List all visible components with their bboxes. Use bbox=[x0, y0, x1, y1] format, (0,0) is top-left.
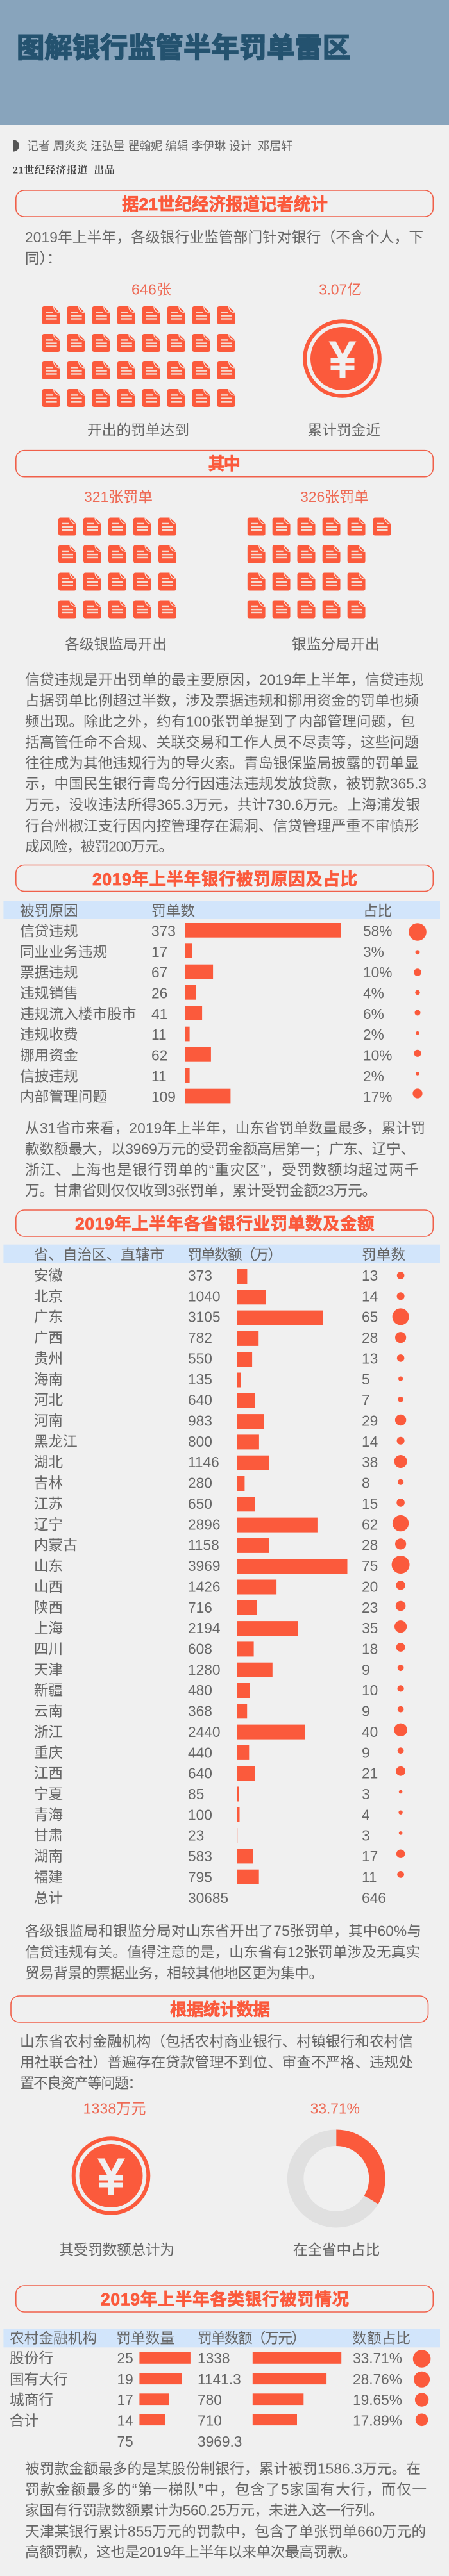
row: 股份行: 33.71% bbox=[353, 2350, 402, 2366]
row: 内部管理问题: 内部管理问题 bbox=[20, 1088, 107, 1105]
paragraph: closing: 高额罚款，这也是2019年上半年以来单次最高罚款。 bbox=[25, 2544, 357, 2561]
paragraph: rural finance: 用社联合社）普遍存在贷款管理不到位、审查不严格、违规处 bbox=[20, 2054, 413, 2070]
row: 福建: 11 bbox=[362, 1868, 377, 1885]
icon grid: tickets bbox=[42, 306, 235, 407]
row: 海南: 135 bbox=[188, 1371, 212, 1388]
table header bbox=[3, 901, 440, 919]
paragraph: rural finance: 山东省农村金融机构（包括农村商业银行、村镇银行和农村信 bbox=[20, 2033, 413, 2050]
paragraph: credit violations: 信贷违规是开出罚单的最主要原因，2019年上半年，信贷违规 bbox=[25, 672, 423, 688]
paragraph: credit violations: 示，中国民生银行青岛分行因违法违规发放贷款，被罚款365.3 bbox=[25, 776, 427, 792]
stat: 3.07亿 fines bbox=[305, 281, 380, 438]
table header: 罚单数量 bbox=[116, 2330, 174, 2347]
row: 违规收费: 11 bbox=[151, 1026, 167, 1043]
row: 黑龙江: 14 bbox=[362, 1433, 378, 1450]
row: 信披违规: 11 bbox=[151, 1068, 167, 1084]
paragraph: credit violations: 成风险，被罚200万元。 bbox=[25, 838, 173, 854]
row: 江苏: 650 bbox=[188, 1495, 212, 1512]
table header: 省、自治区、直辖市 bbox=[34, 1247, 164, 1263]
row: 违规收费: 违规收费 bbox=[20, 1026, 78, 1043]
row: 青海 bbox=[34, 1806, 403, 1823]
row: 新疆: 10 bbox=[362, 1682, 378, 1699]
row: 广西: 28 bbox=[362, 1329, 378, 1346]
row: 违规销售: 4% bbox=[363, 985, 384, 1001]
row: 河北 bbox=[34, 1392, 403, 1408]
section heading: 其中 bbox=[16, 451, 433, 477]
row: 河北: 7 bbox=[362, 1392, 370, 1408]
row: 浙江: 浙江 bbox=[34, 1724, 63, 1740]
row: 同业业务违规: 3% bbox=[363, 943, 384, 960]
row: 挪用资金: 62 bbox=[151, 1047, 167, 1064]
row: 安徽: 373 bbox=[188, 1267, 212, 1284]
row: 合计: 14 bbox=[117, 2413, 133, 2429]
row: 重庆: 9 bbox=[362, 1744, 370, 1761]
row: 甘肃: 甘肃 bbox=[34, 1827, 63, 1844]
row: 青海: 青海 bbox=[34, 1806, 63, 1823]
section heading: 各省银行业罚单数及金额 bbox=[16, 1210, 433, 1236]
paragraph: credit violations: 行台州椒江支行因内控管理存在漏洞、信贷管理严重不审慎形 bbox=[25, 817, 419, 834]
row: 广东: 3105 bbox=[188, 1309, 220, 1325]
row: 内蒙古: 28 bbox=[362, 1537, 378, 1554]
row: 国有大行: 19 bbox=[117, 2371, 133, 2388]
paragraph: Shandong: 信贷违规有关。值得注意的是，山东省有12张罚单涉及无真实 bbox=[25, 1943, 420, 1960]
row: 北京: 1040 bbox=[188, 1288, 220, 1304]
stat: 33.71% donut: 33.71% bbox=[310, 2100, 360, 2117]
stat: 321 tickets by regulators: 各级银监局开出 bbox=[65, 636, 167, 652]
row: 安徽 bbox=[34, 1267, 404, 1284]
row: 广东 bbox=[34, 1308, 409, 1325]
paragraph: Shandong: 贸易背景的票据业务，相较其他地区更为集中。 bbox=[25, 1965, 323, 1981]
stat: 33.71% donut: 在全省中占比 bbox=[293, 2241, 380, 2258]
paragraph: rural finance: 置不良资产等问题： bbox=[20, 2075, 142, 2091]
row: 吉林 bbox=[34, 1475, 403, 1492]
row: 江苏: 江苏 bbox=[34, 1495, 63, 1512]
row: 浙江: 2440 bbox=[188, 1724, 220, 1740]
paragraph: provinces: 万。甘肃省则仅仅收到3张罚单，累计受罚金额23万元。 bbox=[25, 1183, 377, 1199]
row: 广东: 广东 bbox=[34, 1309, 63, 1325]
row: 吉林: 8 bbox=[362, 1475, 370, 1492]
row: 宁夏: 85 bbox=[188, 1786, 204, 1802]
stat: 3.07亿 fines: 累计罚金近 bbox=[308, 422, 380, 438]
stat: 646 tickets: 开出的罚单达到 bbox=[87, 422, 189, 438]
row: 违规流入楼市股市: 违规流入楼市股市 bbox=[20, 1006, 136, 1022]
paragraph: provinces bbox=[25, 1120, 425, 1199]
row: 违规流入楼市股市: 41 bbox=[151, 1006, 167, 1022]
row: 上海: 2194 bbox=[188, 1620, 220, 1636]
row: 挪用资金 bbox=[20, 1047, 421, 1064]
paragraph: credit violations: 占据罚单比例超过半数，涉及票据违规和挪用资金的罚单也频 bbox=[25, 692, 419, 709]
row: 江西: 江西 bbox=[34, 1765, 63, 1782]
icon: yuan coin bbox=[74, 2138, 148, 2213]
row: 总计 bbox=[34, 1890, 386, 1906]
icon grid: 326 tickets bbox=[248, 518, 391, 618]
row: 票据违规: 票据违规 bbox=[20, 964, 78, 981]
row: 天津: 天津 bbox=[34, 1661, 63, 1678]
donut chart bbox=[296, 2138, 377, 2220]
row: 贵州 bbox=[34, 1350, 404, 1367]
row: 北京: 北京 bbox=[34, 1288, 63, 1304]
stat: 321 tickets by regulators: 321张罚单 bbox=[84, 488, 153, 505]
row: 股份行: 股份行 bbox=[10, 2350, 53, 2366]
row: 总计: 646 bbox=[362, 1890, 386, 1906]
table header bbox=[3, 2329, 440, 2347]
row: 内部管理问题: 109 bbox=[151, 1088, 176, 1105]
row: 内部管理问题 bbox=[20, 1088, 423, 1105]
row: 黑龙江: 黑龙江 bbox=[34, 1433, 78, 1450]
section heading: 各省银行业罚单数及金额: 2019年上半年各省银行业罚单数及金额 bbox=[75, 1214, 375, 1233]
table: provinces bbox=[3, 1245, 440, 1906]
row: 违规流入楼市股市 bbox=[20, 1006, 421, 1022]
section heading: 其中: 其中 bbox=[208, 454, 241, 474]
row: 湖北 bbox=[34, 1454, 407, 1470]
row: 重庆: 重庆 bbox=[34, 1744, 63, 1761]
row: totals: 3969.3 bbox=[198, 2433, 242, 2450]
row: 广西 bbox=[34, 1329, 406, 1346]
row: 湖北: 1146 bbox=[188, 1454, 219, 1470]
paragraph: credit violations: 括高管任命不合规、关联交易和工作人员不尽责等，这些问题 bbox=[25, 734, 419, 751]
row: 陕西: 23 bbox=[362, 1599, 378, 1616]
row: 国有大行 bbox=[10, 2371, 430, 2388]
paragraph: rural finance bbox=[20, 2033, 413, 2091]
row: 江西: 640 bbox=[188, 1765, 212, 1782]
row: 湖南: 湖南 bbox=[34, 1848, 63, 1865]
row: 四川: 四川 bbox=[34, 1641, 63, 1658]
paragraph: closing: 被罚款金额最多的是某股份制银行，累计被罚1586.3万元。在 bbox=[25, 2461, 421, 2477]
row: 重庆: 440 bbox=[188, 1744, 212, 1761]
stat: 326 tickets by sub-bureaus: 银监分局开出 bbox=[292, 636, 380, 652]
table header: 数额占比 bbox=[352, 2330, 411, 2347]
header banner bbox=[0, 0, 449, 125]
stat: 321 tickets by regulators bbox=[58, 488, 176, 652]
row: 国有大行: 1141.3 bbox=[198, 2371, 241, 2388]
stat: 326 tickets by sub-bureaus bbox=[248, 488, 391, 652]
row: 四川: 18 bbox=[362, 1641, 378, 1658]
table header bbox=[3, 1245, 440, 1263]
row: 城商行: 19.65% bbox=[353, 2391, 402, 2408]
row: 重庆 bbox=[34, 1744, 403, 1761]
row: 股份行 bbox=[10, 2350, 430, 2368]
row: 黑龙江: 800 bbox=[188, 1433, 212, 1450]
row: 城商行: 780 bbox=[198, 2391, 222, 2408]
paragraph: Shandong: 各级银监局和银监分局对山东省开出了75张罚单，其中60%与 bbox=[25, 1923, 421, 1940]
row: 广西: 广西 bbox=[34, 1329, 63, 1346]
row: 辽宁: 2896 bbox=[188, 1516, 220, 1533]
row: 内蒙古 bbox=[34, 1537, 406, 1554]
row: 贵州: 550 bbox=[188, 1350, 212, 1367]
table header: 罚单数 bbox=[151, 902, 195, 919]
section heading: 各类银行被罚情况 bbox=[16, 2286, 433, 2312]
row: 北京 bbox=[34, 1288, 405, 1304]
row: 信贷违规 bbox=[20, 923, 427, 941]
paragraph: closing: 天津某银行累计855万元的罚款中，包含了单张罚单660万元的 bbox=[25, 2523, 426, 2539]
table header: 被罚原因 bbox=[20, 902, 78, 919]
section heading: 根据统计数据 bbox=[11, 1996, 428, 2022]
table header: 占比 bbox=[363, 902, 392, 919]
stat: 646 tickets: 646张 bbox=[131, 281, 171, 297]
row: 违规流入楼市股市: 6% bbox=[363, 1006, 384, 1022]
row: 安徽: 13 bbox=[362, 1267, 378, 1284]
row: 云南: 9 bbox=[362, 1703, 370, 1720]
row: 违规销售: 违规销售 bbox=[20, 985, 78, 1001]
row: 陕西: 陕西 bbox=[34, 1599, 63, 1616]
row: 票据违规 bbox=[20, 964, 421, 981]
row: 天津: 9 bbox=[362, 1661, 370, 1678]
row: 挪用资金: 10% bbox=[363, 1047, 392, 1064]
row: 山东: 山东 bbox=[34, 1558, 63, 1574]
row: 陕西 bbox=[34, 1599, 405, 1616]
paragraph: credit violations: 频出现。除此之外，约有100张罚单提到了内部管理问题，包 bbox=[25, 713, 415, 729]
row: 内蒙古: 1158 bbox=[188, 1537, 219, 1554]
row: 辽宁 bbox=[34, 1515, 409, 1533]
row: 浙江: 40 bbox=[362, 1724, 378, 1740]
row: 内部管理问题: 17% bbox=[363, 1088, 392, 1105]
section heading: 银行被罚原因及占比: 2019年上半年银行被罚原因及占比 bbox=[92, 870, 357, 889]
paragraph: closing bbox=[25, 2461, 427, 2561]
row: 黑龙江 bbox=[34, 1433, 405, 1450]
row: 信贷违规: 58% bbox=[363, 923, 392, 940]
row: 股份行: 1338 bbox=[198, 2350, 230, 2366]
table header: 罚单数 bbox=[362, 1247, 405, 1263]
row: 总计: 总计 bbox=[34, 1890, 63, 1906]
row: 湖北: 湖北 bbox=[34, 1454, 63, 1470]
row: 同业业务违规: 17 bbox=[151, 943, 167, 960]
intro text: 2019年上半年，各级银行业监管部门针对银行（不含个人，下 bbox=[25, 229, 423, 245]
row: 新疆: 480 bbox=[188, 1682, 212, 1699]
row: 吉林: 280 bbox=[188, 1475, 212, 1492]
row: 青海: 4 bbox=[362, 1806, 370, 1823]
stat: 1338万元 bbox=[59, 2100, 174, 2258]
row: 贵州: 贵州 bbox=[34, 1350, 63, 1367]
stat: 3.07亿 fines: 3.07亿 bbox=[319, 281, 362, 297]
row: 挪用资金: 挪用资金 bbox=[20, 1047, 78, 1064]
row: 贵州: 13 bbox=[362, 1350, 378, 1367]
title: 图解银行监管半年罚单雷区 bbox=[17, 33, 350, 64]
row: 甘肃 bbox=[34, 1827, 402, 1844]
stat: 1338万元: 其受罚数额总计为 bbox=[59, 2241, 174, 2258]
row: totals: 75 bbox=[117, 2433, 133, 2450]
row: 上海: 上海 bbox=[34, 1620, 63, 1636]
row: 海南: 5 bbox=[362, 1371, 370, 1388]
row: 辽宁: 62 bbox=[362, 1516, 378, 1533]
row: 同业业务违规: 同业业务违规 bbox=[20, 943, 107, 960]
stat: 326 tickets by sub-bureaus: 326张罚单 bbox=[300, 488, 369, 505]
row: 新疆: 新疆 bbox=[34, 1682, 63, 1699]
section heading: 根据统计数据: 根据统计数据 bbox=[170, 2000, 270, 2019]
row: 国有大行: 28.76% bbox=[353, 2371, 402, 2388]
row: 山东 bbox=[34, 1556, 410, 1574]
row: 福建: 795 bbox=[188, 1868, 212, 1885]
paragraph: provinces: 浙江、上海也是银行罚单的“重灾区”，受罚数额均超过两千 bbox=[25, 1161, 419, 1178]
row: 山西: 1426 bbox=[188, 1578, 220, 1595]
row: 河北: 640 bbox=[188, 1392, 212, 1408]
row: 天津 bbox=[34, 1661, 403, 1678]
paragraph: credit violations: 往往成为其他违规行为的导火索。青岛银保监局披露的罚单显 bbox=[25, 754, 419, 771]
table header: 农村金融机构 bbox=[10, 2330, 97, 2347]
table: penalty reasons bbox=[3, 901, 440, 1105]
section heading: 银行被罚原因及占比 bbox=[16, 865, 433, 891]
row: 信贷违规: 信贷违规 bbox=[20, 923, 78, 940]
section heading: 据21世纪经济报道记者统计: 据21世纪经济报道记者统计 bbox=[122, 195, 328, 214]
row: 违规销售: 26 bbox=[151, 985, 167, 1001]
row: totals bbox=[117, 2433, 242, 2450]
row: 违规收费 bbox=[20, 1026, 419, 1043]
paragraph: provinces: 从31省市来看，2019年上半年，山东省罚单数量最多，累计罚 bbox=[25, 1120, 425, 1136]
stat: 33.71% donut bbox=[293, 2100, 380, 2258]
table: bank types bbox=[3, 2329, 440, 2450]
row: 河南 bbox=[34, 1413, 406, 1429]
row: 城商行: 城商行 bbox=[10, 2391, 53, 2408]
row: 合计 bbox=[10, 2413, 428, 2429]
row: 宁夏: 宁夏 bbox=[34, 1786, 63, 1802]
row: 四川: 608 bbox=[188, 1641, 212, 1658]
row: 山西: 山西 bbox=[34, 1578, 63, 1595]
intro text: 同）： bbox=[25, 250, 62, 267]
paragraph: credit violations: 万元，没收违法所得365.3万元，共计730.6万元。上海浦发银 bbox=[25, 796, 420, 813]
paragraph: Shandong bbox=[25, 1923, 421, 1981]
row: 信披违规: 2% bbox=[363, 1068, 384, 1084]
row: 云南 bbox=[34, 1703, 403, 1720]
row: 信披违规: 信披违规 bbox=[20, 1068, 78, 1084]
row: 陕西: 716 bbox=[188, 1599, 212, 1616]
row: 江西: 21 bbox=[362, 1765, 378, 1782]
row: 江西 bbox=[34, 1765, 405, 1782]
row: 信披违规 bbox=[20, 1068, 419, 1084]
row: 福建 bbox=[34, 1868, 404, 1885]
row: 云南: 368 bbox=[188, 1703, 212, 1720]
row: 山西 bbox=[34, 1578, 405, 1595]
row: 青海: 100 bbox=[188, 1806, 212, 1823]
paragraph: closing: 家国有行罚款数额累计为560.25万元，未进入这一行列。 bbox=[25, 2502, 384, 2519]
icon grid: 321 tickets bbox=[58, 518, 176, 618]
row: 湖北: 38 bbox=[362, 1454, 378, 1470]
intro text bbox=[25, 229, 423, 267]
row: 海南: 海南 bbox=[34, 1371, 63, 1388]
row: 湖南: 17 bbox=[362, 1848, 378, 1865]
row: 国有大行: 国有大行 bbox=[10, 2371, 68, 2388]
row: 浙江 bbox=[34, 1724, 407, 1740]
row: 合计: 17.89% bbox=[353, 2413, 402, 2429]
source credit: 21世纪经济报道 出品 bbox=[13, 164, 115, 176]
row: 天津: 1280 bbox=[188, 1661, 220, 1678]
row: 票据违规: 10% bbox=[363, 964, 392, 981]
row: 合计: 710 bbox=[198, 2413, 222, 2429]
row: 信贷违规: 373 bbox=[151, 923, 176, 940]
row: 北京: 14 bbox=[362, 1288, 378, 1304]
row: 山东: 3969 bbox=[188, 1558, 220, 1574]
row: 甘肃: 23 bbox=[188, 1827, 204, 1844]
row: 河南: 河南 bbox=[34, 1413, 63, 1429]
stat: 646 tickets bbox=[42, 281, 235, 438]
row: 江苏: 15 bbox=[362, 1495, 378, 1512]
row: 上海 bbox=[34, 1620, 407, 1636]
row: 广西: 782 bbox=[188, 1329, 212, 1346]
row: 河南: 983 bbox=[188, 1413, 212, 1429]
row: 宁夏: 3 bbox=[362, 1786, 370, 1802]
row: 山西: 20 bbox=[362, 1578, 378, 1595]
table header: 罚单数额（万） bbox=[187, 1247, 282, 1263]
row: 广东: 65 bbox=[362, 1309, 378, 1325]
row: 河北: 河北 bbox=[34, 1392, 63, 1408]
row: 安徽: 安徽 bbox=[34, 1267, 63, 1284]
row: 湖南 bbox=[34, 1848, 405, 1865]
row: 湖南: 583 bbox=[188, 1848, 212, 1865]
section heading: 各类银行被罚情况: 2019年上半年各类银行被罚情况 bbox=[101, 2289, 349, 2309]
row: 吉林: 吉林 bbox=[34, 1475, 63, 1492]
row: 海南 bbox=[34, 1371, 403, 1388]
paragraph: provinces: 款数额最大，以3969万元的受罚金额高居第一；广东、辽宁、 bbox=[25, 1140, 415, 1157]
row: 总计: 30685 bbox=[188, 1890, 228, 1906]
row: 城商行: 17 bbox=[117, 2391, 133, 2408]
row: 违规收费: 2% bbox=[363, 1026, 384, 1043]
section heading: 据21世纪经济报道记者统计 bbox=[16, 190, 433, 217]
row: 福建: 福建 bbox=[34, 1868, 63, 1885]
row: 内蒙古: 内蒙古 bbox=[34, 1537, 78, 1554]
row: 云南: 云南 bbox=[34, 1703, 63, 1720]
row: 股份行: 25 bbox=[117, 2350, 133, 2366]
row: 票据违规: 67 bbox=[151, 964, 167, 981]
row: 四川 bbox=[34, 1641, 405, 1658]
row: 辽宁: 辽宁 bbox=[34, 1516, 63, 1533]
row: 甘肃: 3 bbox=[362, 1827, 370, 1844]
table header: 罚单数额（万元） bbox=[198, 2330, 306, 2347]
row: 新疆 bbox=[34, 1682, 404, 1699]
icon: yuan coin bbox=[305, 321, 380, 396]
row: 违规销售 bbox=[20, 985, 420, 1001]
row: 山东: 75 bbox=[362, 1558, 378, 1574]
byline: 记者 周炎炎 汪弘量 瞿翰妮 编辑 李伊琳 设计 邓居轩 bbox=[27, 140, 292, 153]
row: 河南: 29 bbox=[362, 1413, 378, 1429]
stat: 1338万元: 1338万元 bbox=[83, 2100, 146, 2117]
row: 江苏 bbox=[34, 1495, 405, 1512]
row: 同业业务违规 bbox=[20, 943, 419, 960]
row: 城商行 bbox=[10, 2391, 428, 2408]
row: 上海: 35 bbox=[362, 1620, 378, 1636]
row: 合计: 合计 bbox=[10, 2413, 38, 2429]
row: 宁夏 bbox=[34, 1786, 402, 1802]
paragraph: closing: 罚款金额最多的“第一梯队”中，包含了5家国有大行，而仅一 bbox=[25, 2481, 427, 2498]
paragraph: credit violations bbox=[25, 672, 427, 854]
